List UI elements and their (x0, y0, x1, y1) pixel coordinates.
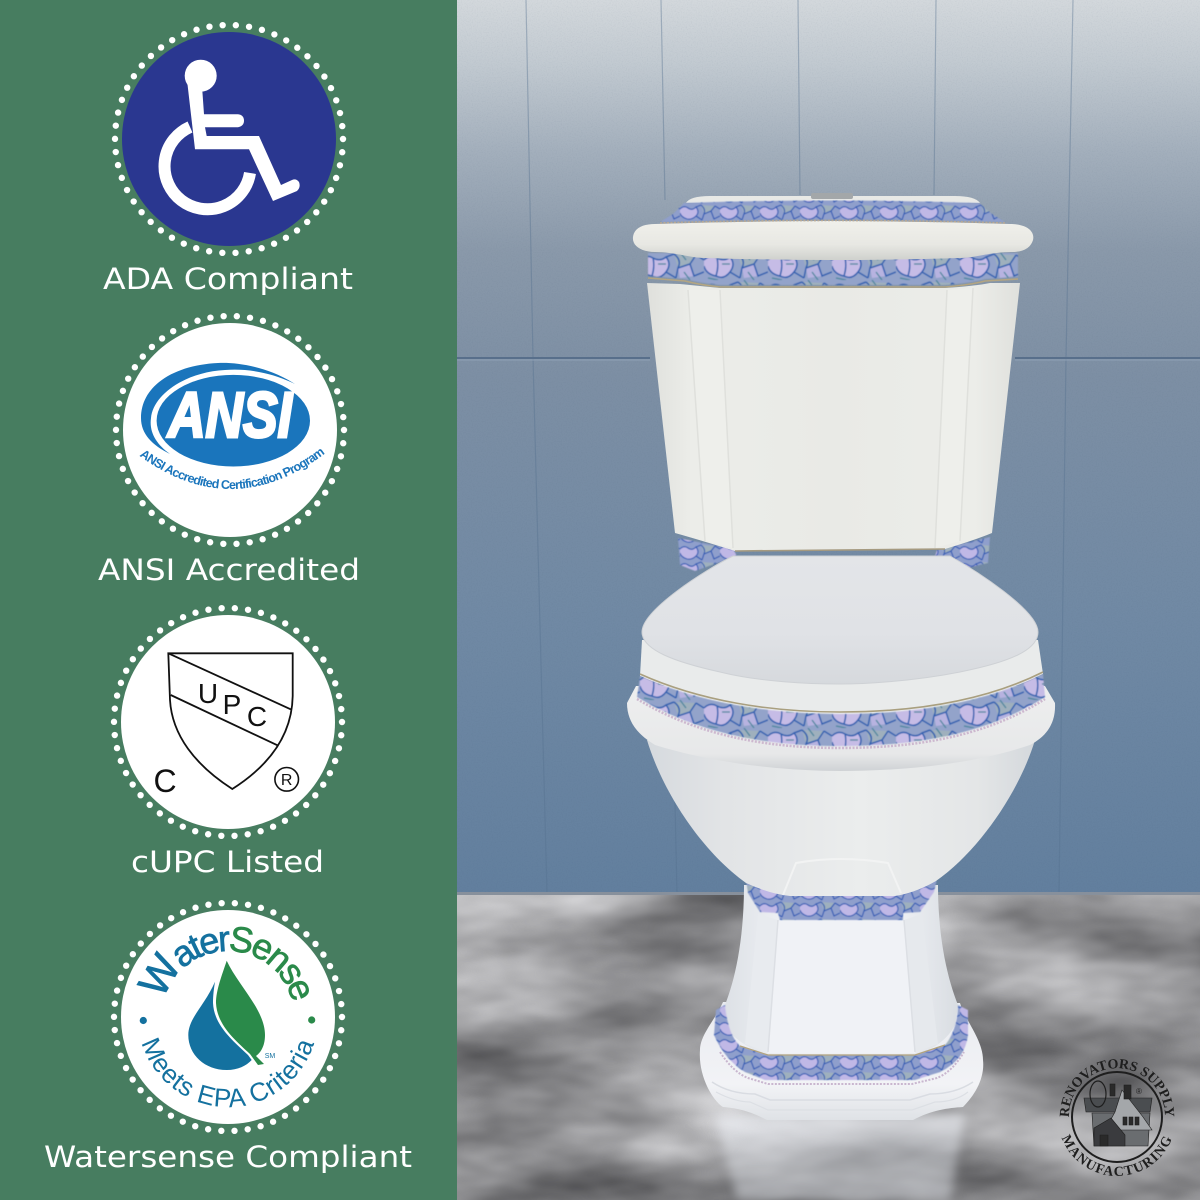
badge: ANSI Accredited (98, 313, 360, 587)
tank upper decorative band (648, 253, 1018, 287)
bowl (647, 740, 1035, 896)
logo wordmark: ANSI (166, 379, 293, 451)
left dot (140, 1017, 147, 1024)
logo swoosh (141, 363, 295, 454)
toilet reflection on floor (715, 1115, 965, 1200)
service mark: SM (265, 1053, 275, 1060)
shield letters: P (223, 689, 241, 720)
brand seal: Renovators Supply Manufacturing (1060, 1059, 1174, 1176)
blue disc (122, 32, 336, 246)
tank lid rim (633, 221, 1033, 260)
flush button (811, 193, 853, 199)
white disc (121, 615, 335, 829)
label: ADA Compliant (103, 262, 353, 296)
photo: bathroom scene (457, 0, 1200, 1200)
pedestal upper decorative band (745, 874, 938, 920)
pedestal body (725, 885, 958, 1056)
seal ring (1072, 1072, 1162, 1162)
badge: cUPC Listed (114, 608, 342, 879)
shield letters: C (247, 701, 267, 732)
bowl decorative band (637, 672, 1045, 748)
marble floor (457, 892, 1200, 1200)
tank bottom decorative bands (678, 537, 990, 571)
wall tiles (457, 0, 1200, 895)
dotted ring (114, 608, 342, 836)
WaterSense arc wordmark: WaterSense (136, 926, 309, 1000)
dotted ring (115, 25, 343, 253)
seal house drawing (1084, 1081, 1152, 1146)
cUPC shield mark (153, 653, 299, 799)
toilet lid (642, 556, 1038, 684)
label: ANSI Accredited (98, 553, 360, 587)
shield letters: U (198, 678, 218, 709)
badge: WaterSense (44, 900, 412, 1174)
icon: wheelchair (165, 60, 300, 209)
EPA arc caption: Meets EPA Criteria (142, 1038, 314, 1108)
shield outline (168, 653, 293, 789)
shield letters (198, 678, 267, 732)
panel: certifications sidebar (44, 22, 412, 1174)
label: Watersense Compliant (44, 1140, 412, 1174)
tank body (647, 283, 1020, 551)
pedestal lower decorative band (714, 1005, 968, 1084)
ANSI logo (140, 362, 325, 490)
seal bottom text: MANUFACTURING (1062, 1134, 1172, 1176)
logo curved caption: ANSI Accredited Certification Program (140, 449, 325, 490)
pedestal base (700, 1002, 983, 1120)
dotted ring (116, 316, 344, 544)
label: cUPC Listed (131, 845, 324, 879)
tank top decorative band (660, 196, 1005, 223)
registered mark (275, 768, 299, 791)
badge: ADA Compliant (103, 25, 353, 296)
toilet (627, 193, 1055, 1120)
bowl rim (627, 686, 1055, 771)
right dot (308, 1016, 315, 1024)
seal registered mark: ® (1136, 1087, 1142, 1096)
seat (640, 640, 1043, 714)
dotted ring (114, 903, 342, 1131)
icon: water drop and leaf (188, 961, 265, 1070)
white disc (123, 323, 337, 537)
registered mark: R (281, 772, 292, 789)
C mark: C (153, 763, 177, 799)
bowl notch detail (783, 859, 901, 895)
seal top text: RENOVATORS SUPPLY (1060, 1059, 1174, 1117)
white disc (121, 910, 335, 1124)
logo ellipse (157, 375, 310, 467)
